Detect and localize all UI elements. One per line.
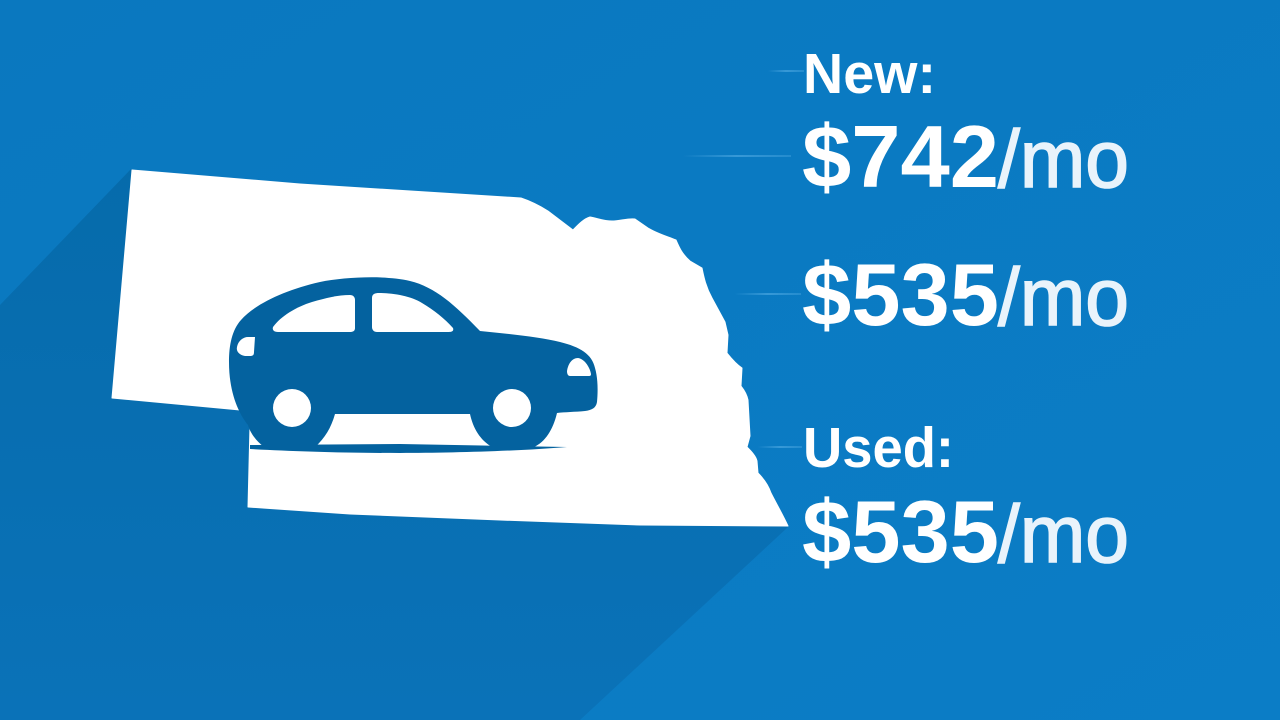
front wheel: [493, 389, 531, 427]
rear window: [273, 295, 355, 332]
price: $535/mo: $535: [802, 245, 999, 344]
car icon: [229, 277, 598, 453]
label: Used: Used:: [803, 416, 954, 480]
Nebraska state shape: [112, 170, 788, 526]
price: new $742/mo: /mo: [998, 114, 1129, 205]
tail light: [237, 337, 255, 356]
rear wheel: [273, 389, 311, 427]
price: used $535/mo: /mo: [998, 489, 1129, 580]
label: New: New:: [803, 42, 936, 106]
price: new $742/mo: $742: [802, 107, 999, 206]
long shadow of state: [0, 169, 788, 720]
price: used $535/mo: [802, 482, 1129, 581]
price: $535/mo: /mo: [998, 252, 1129, 343]
ground shadow: [250, 444, 567, 453]
price: used $535/mo: $535: [802, 482, 999, 581]
price: new $742/mo: [802, 107, 1129, 206]
car body: [229, 277, 598, 447]
head light: [567, 358, 591, 376]
connector lines: [683, 70, 804, 448]
front window: [372, 293, 453, 332]
price: $535/mo: [802, 245, 1129, 344]
